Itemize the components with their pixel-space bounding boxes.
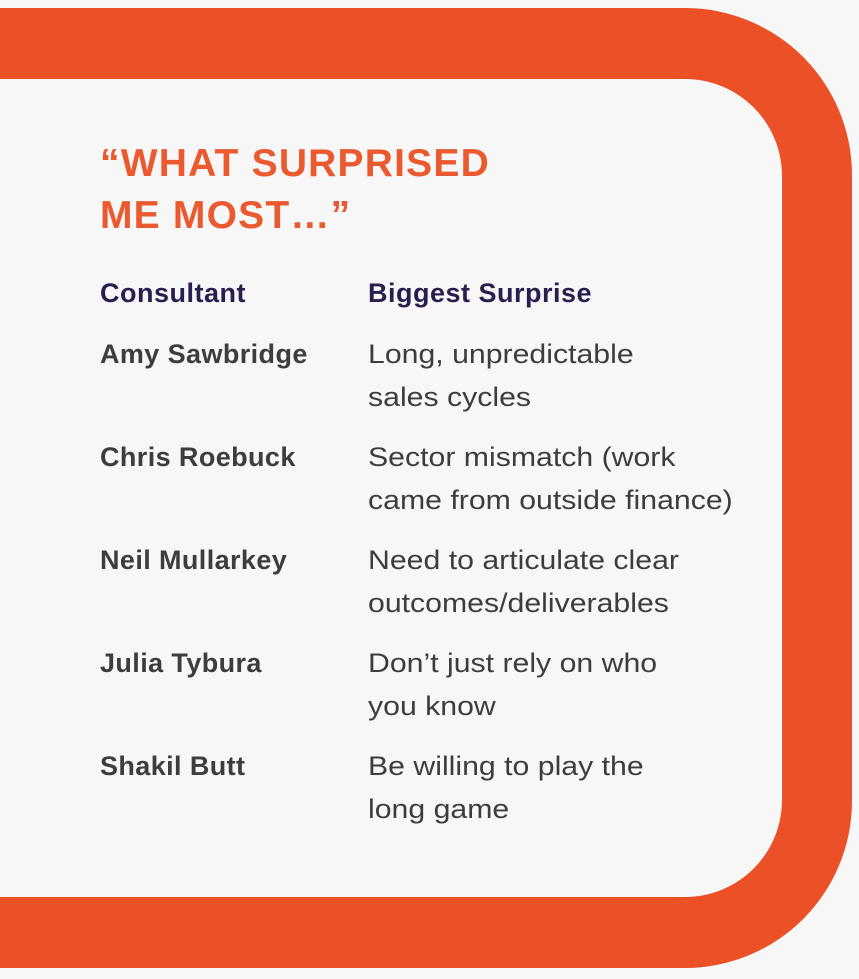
row: Julia xyxy=(100,648,657,721)
row: Shakil: Be willing to play the xyxy=(368,751,644,781)
row: Amy: Amy Sawbridge xyxy=(100,339,308,369)
row: Neil: Neil Mullarkey xyxy=(100,545,287,575)
row: Amy: sales cycles xyxy=(368,382,531,412)
row: Julia: you know xyxy=(368,691,496,721)
row: Shakil xyxy=(100,751,644,824)
row: Chris: Sector mismatch (work xyxy=(368,442,676,472)
title xyxy=(100,142,490,237)
row: Neil: Need to articulate clear xyxy=(368,545,679,575)
header: biggest surprise: Biggest Surprise xyxy=(368,278,592,308)
row: Julia: Don’t just rely on who xyxy=(368,648,657,678)
row: Julia: Julia Tybura xyxy=(100,648,262,678)
row: Chris: came from outside finance) xyxy=(368,485,733,515)
row: Shakil: long game xyxy=(368,794,509,824)
row: Amy: Long, unpredictable xyxy=(368,339,634,369)
row: Chris xyxy=(100,442,733,515)
title: “WHAT SURPRISED xyxy=(100,142,490,185)
row: Amy xyxy=(100,339,634,412)
row: Chris: Chris Roebuck xyxy=(100,442,296,472)
row: Shakil: Shakil Butt xyxy=(100,751,245,781)
row: Neil xyxy=(100,545,679,618)
inner panel xyxy=(0,79,782,897)
header: consultant: Consultant xyxy=(100,278,246,308)
title: ME MOST…” xyxy=(100,194,351,237)
row: Neil: outcomes/deliverables xyxy=(368,588,669,618)
